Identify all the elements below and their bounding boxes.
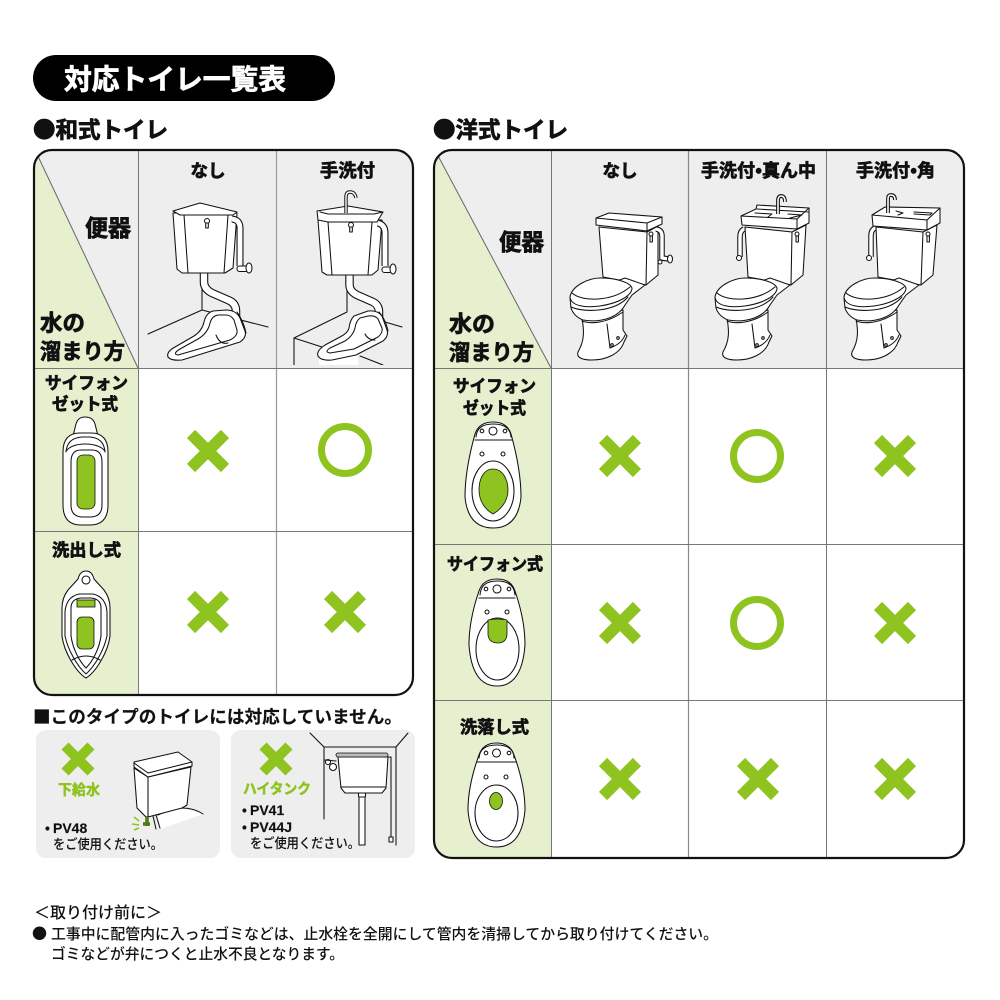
mark: wash-down, corner: no: [878, 762, 912, 796]
mark: siphon, center: yes: [734, 600, 780, 646]
mark: wash-out, none: no: [191, 595, 225, 629]
panel: high tank: [231, 730, 415, 858]
text: PV41 and PV44J: PV44J: [250, 819, 292, 835]
icon: western toilet with center hand wash: [715, 196, 809, 360]
column label: hand wash center: 真ん中: [762, 161, 816, 181]
text block: before installation: ●: [32, 923, 47, 944]
title: 対応トイレ一覧表: [64, 64, 286, 95]
label: toilet: 便器: [85, 215, 131, 241]
column label: hand wash corner: •: [910, 161, 917, 181]
row label: siphon jet: ゼット式: [463, 398, 526, 418]
text: PV48: PV48: [53, 820, 87, 836]
mark: wash-out, hand wash: no: [328, 595, 362, 629]
text: PV48: [45, 820, 163, 852]
column label: none: なし: [602, 161, 638, 181]
column label: hand wash center: •: [756, 161, 762, 181]
mark: siphon jet, corner: no: [878, 439, 912, 473]
row label: siphon: サイフォン式: [447, 555, 543, 574]
row label: wash-down: 洗落し式: [460, 718, 529, 737]
column label: hand wash center: 手洗付: [701, 161, 755, 181]
label: water pooling type: 溜まり方: [40, 340, 125, 364]
text block: before installation: 工事中に配管内に入ったゴミなどは、止水栓を全開にして管内を清掃してから取り付けてください。: [51, 925, 718, 943]
column label: hand wash: 手洗付: [320, 161, 375, 181]
row label: wash-out: 洗出し式: [52, 541, 121, 560]
mark: siphon jet, hand wash: yes: [322, 426, 368, 474]
text: PV41 and PV44J: •: [242, 802, 247, 818]
column label: none: なし: [190, 161, 226, 181]
label: water pooling type: [449, 312, 534, 365]
text: PV41 and PV44J: PV41: [250, 802, 284, 818]
label: high tank: ハイタンク: [243, 781, 311, 798]
title: [33, 55, 335, 101]
heading: unsupported types: ■このタイプのトイレには対応していません。: [33, 704, 402, 729]
panel: Japanese-style table: [34, 150, 413, 695]
icon: low tank: [132, 752, 204, 830]
row label: siphon jet: [453, 377, 536, 418]
label: toilet: 便器: [499, 229, 544, 255]
mark: wash-down, none: no: [603, 762, 637, 796]
mark: wash-down, center: no: [741, 762, 775, 796]
icon: squat toilet with hand wash tank: [294, 192, 402, 365]
icon: siphon jet trap: [63, 417, 108, 525]
icon: siphon jet bowl: [465, 422, 521, 528]
icon: western toilet with corner hand wash: [844, 195, 940, 360]
label: water pooling type: 水の: [449, 312, 495, 337]
text block: before installation: ＜取り付け前に＞: [34, 899, 162, 923]
mark: no: [263, 746, 289, 772]
heading: Western-style toilets: ●洋式トイレ: [433, 113, 568, 145]
panel: low-feed tank: [36, 730, 220, 858]
text: PV48: をご使用ください。: [53, 836, 163, 852]
icon: high tank: [310, 733, 408, 845]
mark: no: [65, 746, 91, 772]
heading: Japanese-style toilets: ●和式トイレ: [33, 113, 168, 145]
row label: siphon jet: サイフォン: [453, 377, 536, 396]
row label: siphon jet: サイフォン: [45, 374, 128, 393]
label: water pooling type: 水の: [40, 311, 85, 336]
icon: western toilet: [570, 213, 672, 360]
column label: hand wash corner: 角: [917, 161, 935, 181]
icon: squat toilet with tank: [148, 203, 268, 360]
text block: before installation: [32, 899, 718, 963]
text: PV41 and PV44J: [242, 802, 360, 851]
row label: siphon jet: ゼット式: [52, 394, 118, 414]
panel: Western-style table: [434, 150, 964, 858]
row label: siphon jet: [45, 374, 128, 414]
label: water pooling type: [40, 311, 125, 364]
icon: wash-down bowl: [468, 743, 525, 847]
icon: siphon bowl: [469, 579, 525, 686]
label: low-feed: 下給水: [58, 782, 100, 799]
text: PV41 and PV44J: をご使用ください。: [250, 835, 360, 851]
mark: siphon jet, none: no: [603, 439, 637, 473]
mark: siphon, corner: no: [878, 606, 912, 640]
text block: before installation: ゴミなどが弁につくと止水不良となります。: [51, 945, 344, 963]
text: PV48: •: [45, 820, 50, 836]
mark: siphon jet, none: no: [191, 434, 225, 468]
label: water pooling type: 溜まり方: [449, 341, 534, 365]
icon: wash-out trap: [62, 571, 110, 678]
mark: siphon jet, center: yes: [734, 432, 780, 480]
column label: hand wash corner: 手洗付: [856, 161, 910, 181]
mark: siphon, none: no: [603, 606, 637, 640]
text: PV41 and PV44J: •: [242, 819, 247, 835]
